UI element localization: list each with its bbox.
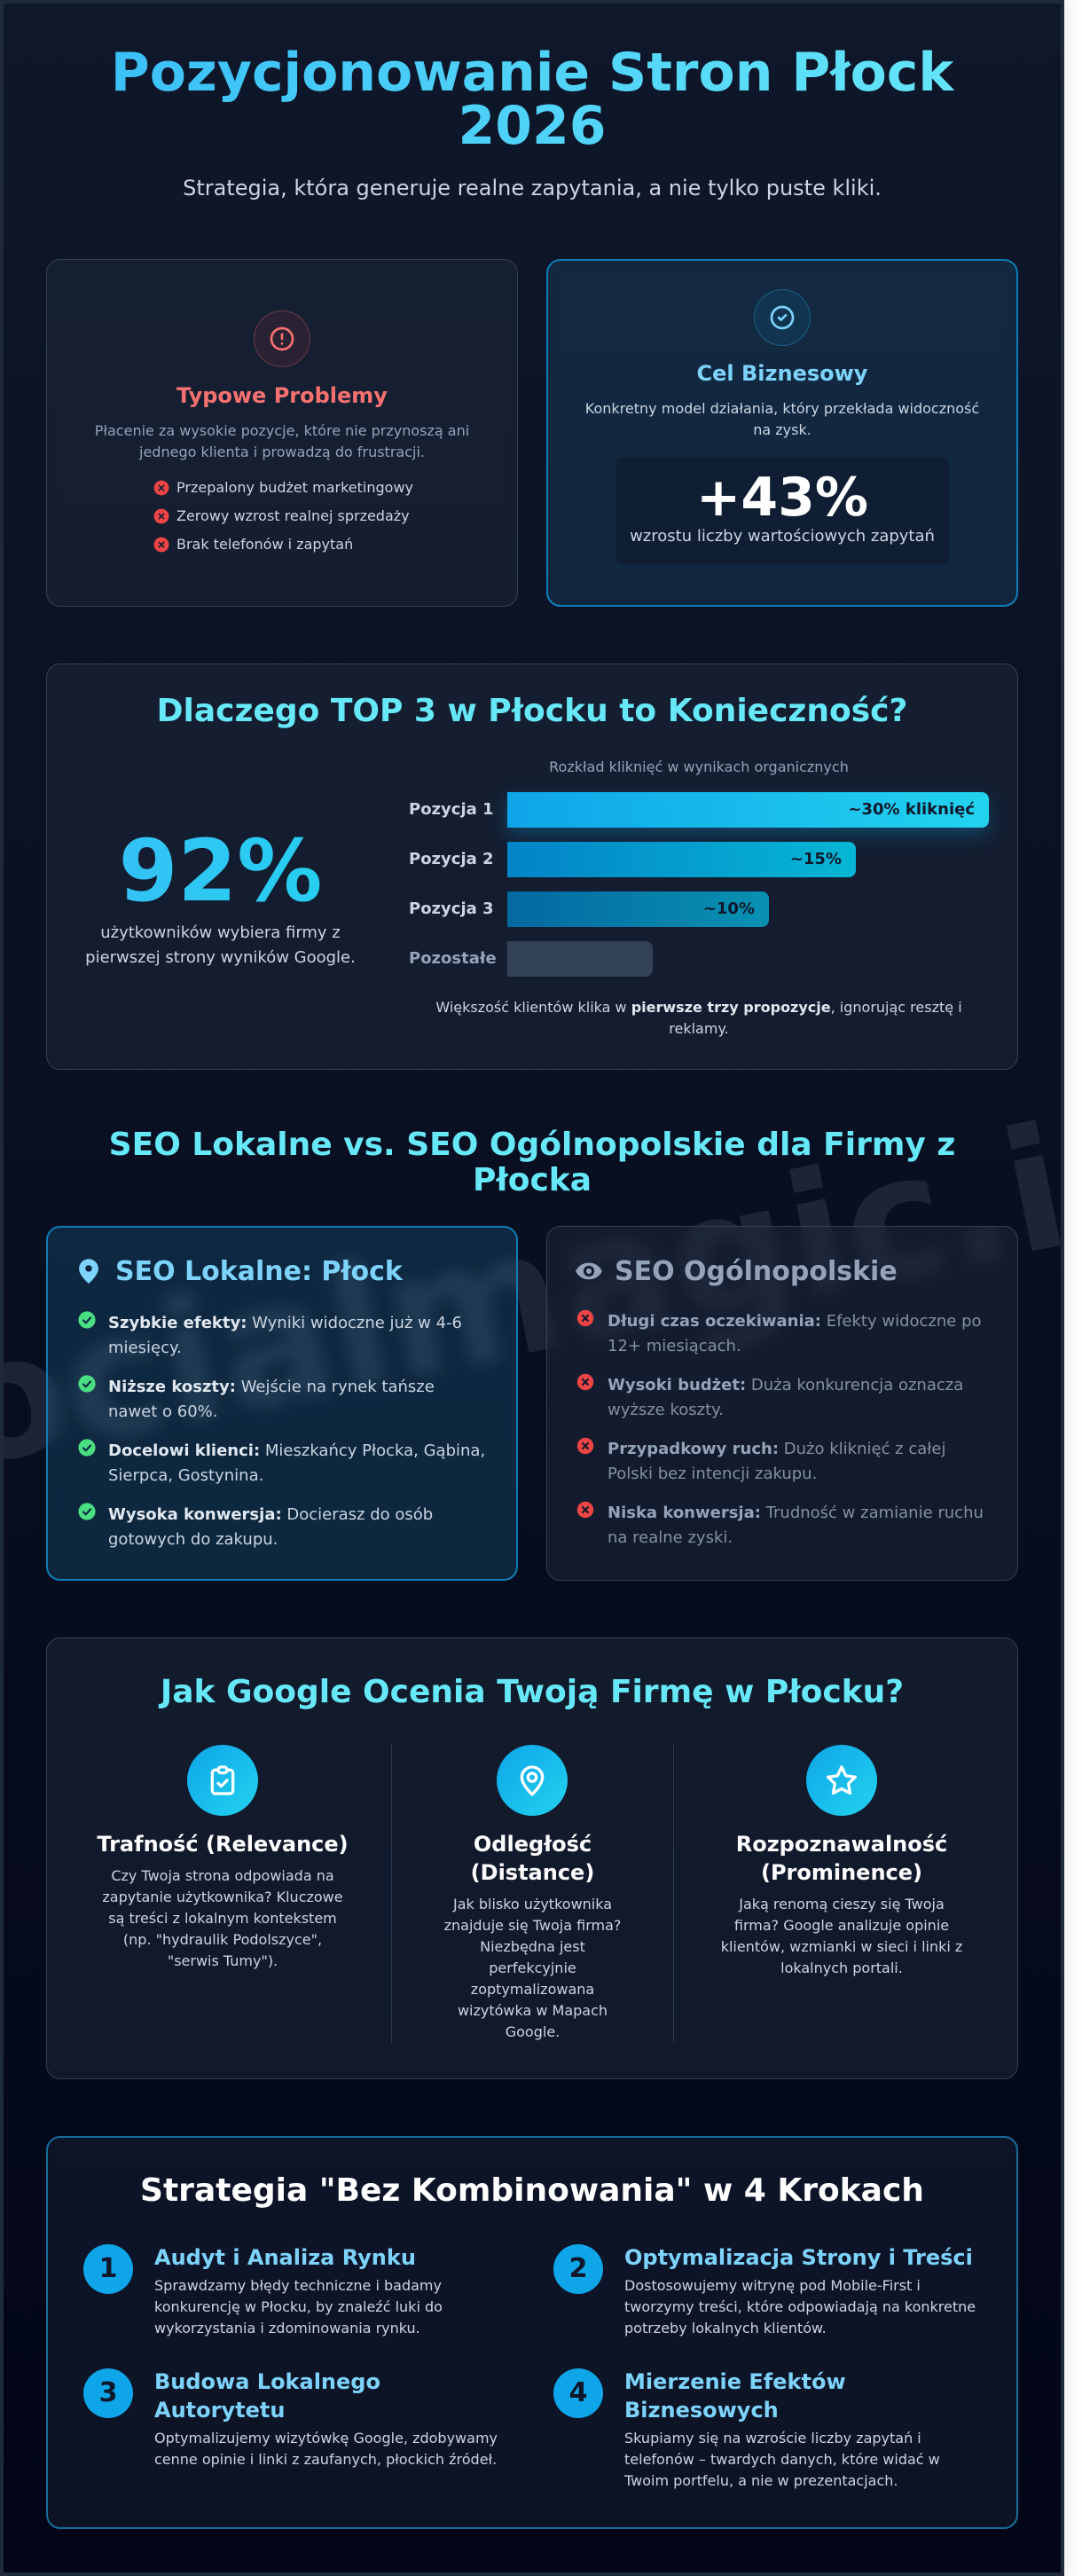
- icon: check: [754, 289, 811, 346]
- text: Czy Twoja strona odpowiada na: [111, 1867, 334, 1884]
- heading: Strategia "Bez Kombinowania" w 4 Krokach: [140, 2172, 924, 2209]
- heading: Typowe Problemy: [176, 383, 388, 408]
- bar: pozostałe: [507, 941, 653, 977]
- stat label: wzrostu liczby wartościowych zapytań: [630, 527, 935, 546]
- panel: strategia: [46, 2136, 1018, 2529]
- text block: Konkretny model działania, który przekłada widoczność: [585, 400, 979, 417]
- icon: warning: [254, 310, 310, 367]
- step title: Optymalizacja Strony i Treści: [624, 2245, 973, 2270]
- step text: Optymalizujemy wizytówkę Google, zdobywamy: [154, 2430, 498, 2446]
- step text: telefonów – twardych danych, które widać w: [624, 2451, 940, 2468]
- title: Pozycjonowanie Stron Płock: [111, 42, 953, 104]
- panel: cel biznesowy: [546, 259, 1018, 607]
- text: perfekcyjnie: [489, 1959, 576, 1976]
- text: wizytówka w Mapach: [458, 2002, 608, 2019]
- text: lokalnych portali.: [780, 1959, 903, 1976]
- item: Szybkie efekty: Wyniki widoczne już w 4-6: [108, 1314, 462, 1332]
- number badge: 4: [569, 2377, 587, 2408]
- item: [576, 1501, 984, 1547]
- stat description: [85, 923, 356, 967]
- text: [102, 1867, 343, 1969]
- text: Jaką renomą cieszy się Twoja: [739, 1896, 945, 1912]
- item: Niska konwersja: Trudność w zamianie ruchu: [608, 1504, 984, 1522]
- list of problems: Przepalony budżet marketingowy: [176, 479, 413, 496]
- heading: SEO Lokalne: Płock: [115, 1256, 403, 1287]
- bar: pozycja 2: [507, 842, 856, 877]
- bar chart: Pozostałe: [409, 949, 497, 968]
- list: drawbacks: [576, 1309, 984, 1547]
- step 1: [83, 2244, 443, 2336]
- heading: Odległość: [474, 1832, 592, 1857]
- heading: (Prominence): [761, 1860, 922, 1885]
- number badge: [83, 2368, 133, 2418]
- heading: Rozpoznawalność: [736, 1832, 947, 1857]
- number badge: [83, 2244, 133, 2294]
- number badge: [553, 2368, 603, 2418]
- chart note: [435, 999, 962, 1037]
- chart note: Większość klientów klika w pierwsze trzy propozycje, ignorując resztę i: [435, 999, 962, 1016]
- step text: [154, 2430, 498, 2468]
- step title: Mierzenie Efektów: [624, 2369, 846, 2394]
- heading: seo lokalne vs ogolnopolskie: Płocka: [473, 1162, 592, 1198]
- number badge: [553, 2244, 603, 2294]
- text: zapytanie użytkownika? Kluczowe: [102, 1889, 343, 1905]
- step text: Twoim portfelu, a nie w prezentacjach.: [624, 2472, 898, 2489]
- text block: na zysk.: [753, 421, 812, 438]
- heading: Jak Google Ocenia Twoją Firmę w Płocku?: [161, 1674, 904, 1710]
- column: trafnosc: [97, 1745, 349, 1969]
- bar: pozycja 1: ~30% kliknięć: [848, 800, 975, 819]
- number badge: 1: [99, 2253, 117, 2284]
- step text: [624, 2430, 940, 2489]
- stat box: [615, 457, 949, 564]
- item: [78, 1311, 462, 1357]
- step 2: [553, 2244, 976, 2336]
- title: 2026: [458, 95, 607, 157]
- panel: jak google ocenia: [46, 1637, 1018, 2079]
- item: [78, 1439, 485, 1485]
- panel: seo ogolnopolskie: [546, 1226, 1018, 1581]
- big stat: [47, 829, 394, 914]
- divider: [391, 1745, 392, 2043]
- heading: [736, 1832, 947, 1885]
- text: Niezbędna jest: [480, 1938, 585, 1955]
- heading: Dlaczego TOP 3 w Płocku to Konieczność?: [157, 693, 907, 729]
- big stat: 92%: [119, 821, 322, 921]
- text: firma? Google analizuje opinie: [734, 1917, 949, 1934]
- step text: [624, 2277, 976, 2336]
- item: Przypadkowy ruch: Dużo kliknięć z całej: [608, 1440, 945, 1458]
- column: odleglosc: [444, 1745, 621, 2040]
- text block: Płacenie za wysokie pozycje, które nie przynoszą ani: [95, 422, 469, 439]
- bar: pozycja 2: ~15%: [790, 850, 842, 868]
- icon: location: [497, 1745, 568, 1816]
- text: "serwis Tumy").: [168, 1952, 278, 1969]
- bar chart: Pozycja 3: [409, 899, 494, 918]
- stat description: pierwszej strony wyników Google.: [85, 948, 356, 967]
- list of problems: [154, 479, 413, 553]
- item: Docelowi klienci: Mieszkańcy Płocka, Gąbina,: [108, 1441, 485, 1460]
- list: advantages: [78, 1311, 485, 1549]
- text block: [585, 400, 979, 438]
- text: (np. "hydraulik Podolszyce",: [123, 1931, 322, 1948]
- step 4: [553, 2368, 940, 2489]
- list of problems: Zerowy wzrost realnej sprzedaży: [176, 507, 410, 524]
- step 3: [83, 2368, 498, 2468]
- step text: tworzymy treści, które odpowiadają na konkretne: [624, 2298, 976, 2315]
- step text: potrzeby lokalnych klientów.: [624, 2320, 827, 2336]
- step title: Autorytetu: [154, 2398, 285, 2423]
- bar: pozycja 3: ~10%: [703, 899, 755, 918]
- item: Wysoka konwersja: Docierasz do osób: [108, 1505, 433, 1524]
- number badge: 2: [569, 2253, 587, 2284]
- heading: seo lokalne vs ogolnopolskie: [109, 1127, 955, 1198]
- divider: [673, 1745, 674, 2043]
- item: miesięcy.: [108, 1339, 182, 1357]
- text block: [95, 422, 469, 460]
- step title: Budowa Lokalnego: [154, 2369, 380, 2394]
- icon: star: [806, 1745, 877, 1816]
- icon: clipboard: [187, 1745, 258, 1816]
- text: [444, 1896, 621, 2040]
- title: [46, 46, 1018, 153]
- text: zoptymalizowana: [471, 1981, 594, 1998]
- heading: [471, 1832, 594, 1885]
- item: [78, 1375, 435, 1421]
- item: Polski bez intencji zakupu.: [608, 1465, 817, 1483]
- item: [576, 1373, 963, 1419]
- chart caption: Rozkład kliknięć w wynikach organicznych: [549, 758, 849, 775]
- icon: pin: [79, 1259, 98, 1284]
- heading: Trafność (Relevance): [97, 1832, 349, 1857]
- bar: pozycja 3: [507, 891, 769, 927]
- item: 12+ miesiącach.: [608, 1337, 741, 1355]
- item: [78, 1503, 433, 1549]
- heading: seo lokalne vs ogolnopolskie: SEO Lokalne vs. SEO Ogólnopolskie dla Firmy z: [109, 1127, 955, 1163]
- item: na realne zyski.: [608, 1528, 733, 1547]
- step text: [154, 2277, 443, 2336]
- icon: eye: [576, 1263, 602, 1279]
- subtitle: Strategia, która generuje realne zapytania, a nie tylko puste kliki.: [183, 176, 882, 200]
- step title: Audyt i Analiza Rynku: [154, 2245, 416, 2270]
- heading: SEO Ogólnopolskie: [615, 1256, 898, 1287]
- stat description: użytkowników wybiera firmy z: [100, 923, 341, 942]
- step text: Dostosowujemy witrynę pod Mobile-First i: [624, 2277, 921, 2294]
- panel: seo lokalne: [46, 1226, 518, 1581]
- item: nawet o 60%.: [108, 1402, 217, 1421]
- step text: konkurencję w Płocku, by znaleźć luki do: [154, 2298, 443, 2315]
- item: [576, 1309, 982, 1355]
- step title: [154, 2369, 380, 2423]
- text: klientów, wzmianki w sieci i linki z: [721, 1938, 962, 1955]
- step text: wykorzystania i zdominowania rynku.: [154, 2320, 420, 2336]
- number badge: 3: [99, 2377, 117, 2408]
- item: Niższe koszty: Wejście na rynek tańsze: [108, 1378, 435, 1396]
- list of problems: Brak telefonów i zapytań: [176, 536, 353, 553]
- text: Jak blisko użytkownika: [453, 1896, 612, 1912]
- text: są treści z lokalnym kontekstem: [108, 1910, 337, 1927]
- item: wyższe koszty.: [608, 1401, 724, 1419]
- item: Sierpca, Gostynina.: [108, 1466, 263, 1485]
- item: Wysoki budżet: Duża konkurencja oznacza: [608, 1376, 963, 1394]
- text: Google.: [506, 2023, 560, 2040]
- text: [721, 1896, 962, 1976]
- step title: [624, 2369, 846, 2423]
- step text: cenne opinie i linki z zaufanych, płockich źródeł.: [154, 2451, 497, 2468]
- heading: (Distance): [471, 1860, 594, 1885]
- panel: typowe problemy: [46, 259, 518, 607]
- bar chart: [409, 791, 997, 977]
- bar: pozycja 1: [507, 792, 989, 828]
- heading: Cel Biznesowy: [697, 361, 867, 386]
- chart note: reklamy.: [669, 1020, 729, 1037]
- text: znajduje się Twoja firma?: [444, 1917, 621, 1934]
- step text: Skupiamy się na wzroście liczby zapytań i: [624, 2430, 921, 2446]
- item: [576, 1437, 945, 1483]
- bar chart: Pozycja 2: [409, 850, 494, 868]
- stat value: +43%: [696, 467, 868, 529]
- item: Długi czas oczekiwania: Efekty widoczne po: [608, 1312, 982, 1331]
- panel: dlaczego top 3: [46, 664, 1018, 1070]
- item: gotowych do zakupu.: [108, 1530, 278, 1549]
- bar chart: Pozycja 1: [409, 800, 494, 819]
- column: rozpoznawalnosc: [721, 1745, 962, 1976]
- step title: Biznesowych: [624, 2398, 779, 2423]
- step text: Sprawdzamy błędy techniczne i badamy: [154, 2277, 442, 2294]
- text block: jednego klienta i prowadzą do frustracji.: [139, 444, 425, 460]
